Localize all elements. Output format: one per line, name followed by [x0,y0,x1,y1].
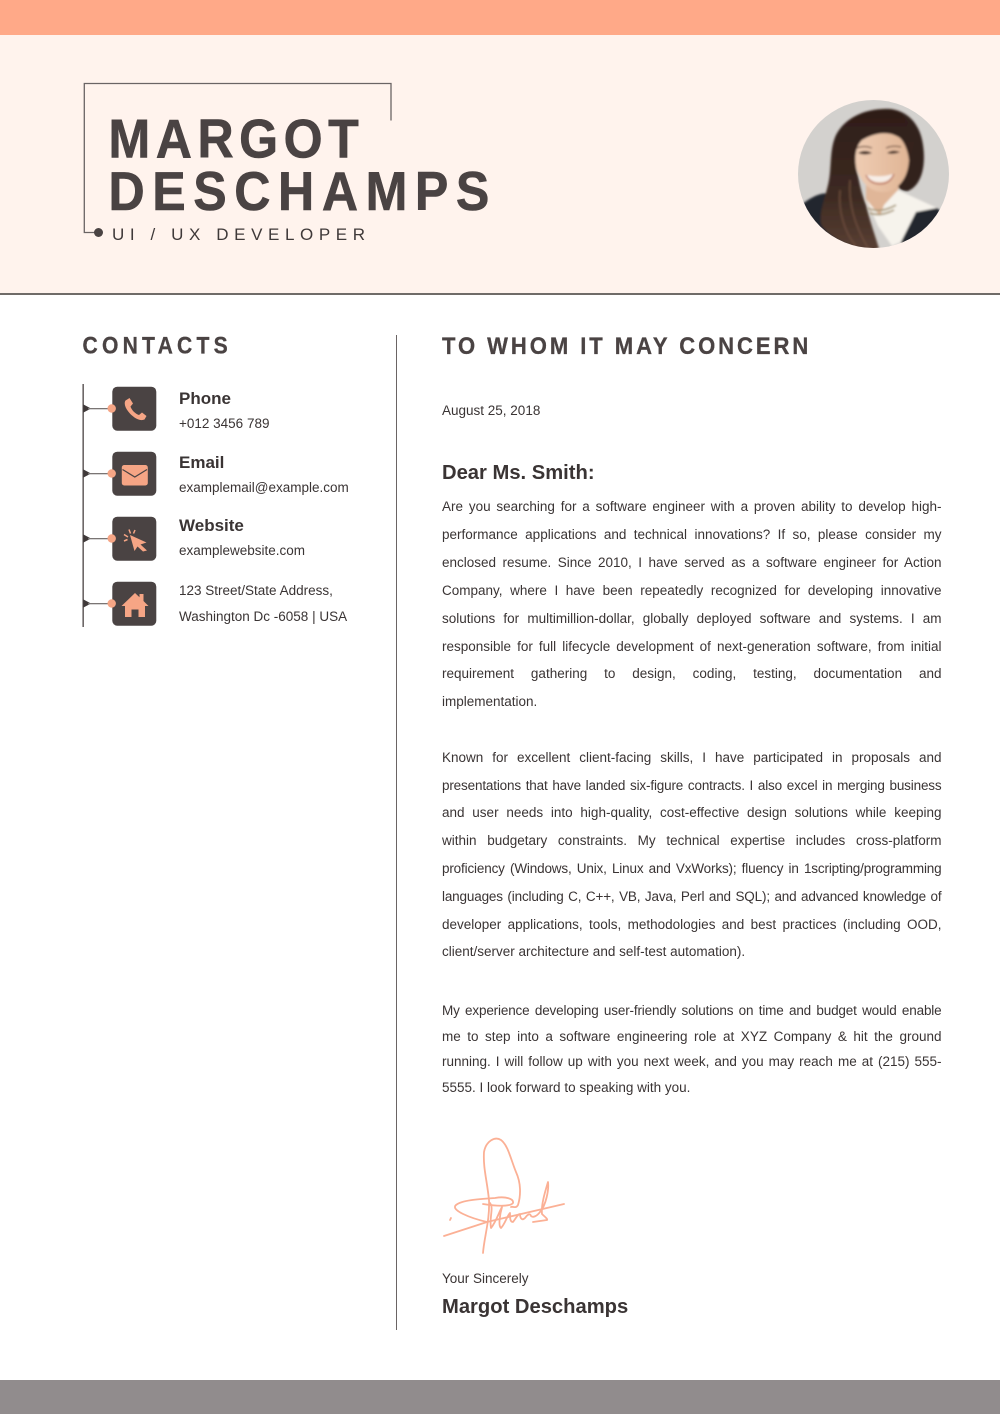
contact: address: 123 Street/State Address, [179,583,333,598]
contact: phone: +012 3456 789 [179,416,269,431]
contact: address [179,583,348,624]
right hair lobe [894,108,926,192]
eyes [858,151,900,154]
icon: cursor [84,517,156,561]
paragraph 2: proficiency (Windows, Unix, Linux and VxWorks); fluency in 1scripting/programming [442,861,942,876]
contact: phone: Phone [179,389,231,408]
contact: email: Email [179,453,224,472]
face [854,130,909,192]
contacts heading: CONTACTS [82,332,228,359]
top bar [0,0,1000,35]
portrait photo [798,100,949,248]
paragraph 2: languages (including C, C++, VB, Java, Perl and SQL); and advanced knowledge of [442,889,942,904]
column divider [396,335,397,1330]
paragraph 1: solutions for multimillion-dollar, globally deployed software and systems. I am [442,611,942,626]
paragraph 1: Are you searching for a software engineer with a proven ability to develop high- [442,499,942,514]
collar and shirt [866,190,937,246]
paragraph 2: within budgetary constraints. My technical expertise includes cross-platform [442,833,942,848]
timeline line [82,384,84,627]
icon: phone [84,387,156,431]
bottom bar [0,1380,1000,1414]
contact: phone [179,389,269,431]
paragraph 2: and user needs into high-quality, cost-effective design solutions while keeping [442,805,942,820]
salutation: Dear Ms. Smith: [442,462,595,484]
contact: website: examplewebsite.com [179,543,305,558]
contact: email: examplemail@example.com [179,480,349,495]
paragraph 2 [442,750,942,959]
contacts timeline and icons [82,384,156,627]
title: name: MARGOT [108,109,359,170]
paragraph 2: client/server architecture and self-test automation). [442,944,745,959]
name block with frame [84,82,489,244]
contact: website: Website [179,516,244,535]
icon: envelope [84,452,156,496]
subtitle: UI / UX DEVELOPER [112,225,365,244]
paragraph 1: requirement gathering to design, coding, testing, documentation and [442,666,942,681]
header rule [0,293,1000,295]
title: name [108,109,489,222]
contact: email [179,453,349,495]
contact: website [179,516,305,558]
date: August 25, 2018 [442,403,540,418]
signer name: Margot Deschamps [442,1296,628,1318]
paragraph 1: implementation. [442,694,537,709]
paragraph 1: responsible for full lifecycle development of next-generation software, from initial [442,639,942,654]
paragraph 1 [442,499,942,709]
paragraph 2: developer applications, tools, methodologies and best practices (including OOD, [442,917,942,932]
paragraph 1: enclosed resume. Since 2010, I have served as a software engineer for Action [442,555,942,570]
necklace [868,205,896,214]
paragraph 3: me to step into a software engineering role at XYZ Company & hit the ground [442,1029,942,1044]
icon: house [84,582,156,626]
jacket left [804,192,856,246]
mouth [867,174,893,182]
paragraph 3: running. I will follow up with you next week, and you may reach me at (215) 555- [442,1054,942,1069]
paragraph 1: performance applications and technical innovations? If so, please consider my [442,527,942,542]
title: name: DESCHAMPS [108,162,489,222]
closing: Your Sincerely [442,1271,529,1286]
jacket right [900,207,940,243]
paragraph 2: Known for excellent client-facing skills, I have participated in proposals and [442,750,942,765]
letter heading: TO WHOM IT MAY CONCERN [442,332,808,359]
neck [865,185,900,214]
main hair [821,109,915,252]
contact: address: Washington Dc -6058 | USA [179,608,347,624]
paragraph 2: presentations that have landed six-figure contracts. I also excel in merging business [442,778,942,793]
paragraph 3 [442,1003,942,1095]
paragraph 1: Company, where I have been repeatedly recognized for developing innovative [442,583,942,598]
title frame line [84,84,391,237]
paragraph 3: My experience developing user-friendly solutions on time and budget would enable [442,1003,942,1018]
header band [0,35,1000,293]
paragraph 3: 5555. I look forward to speaking with you. [442,1080,690,1095]
